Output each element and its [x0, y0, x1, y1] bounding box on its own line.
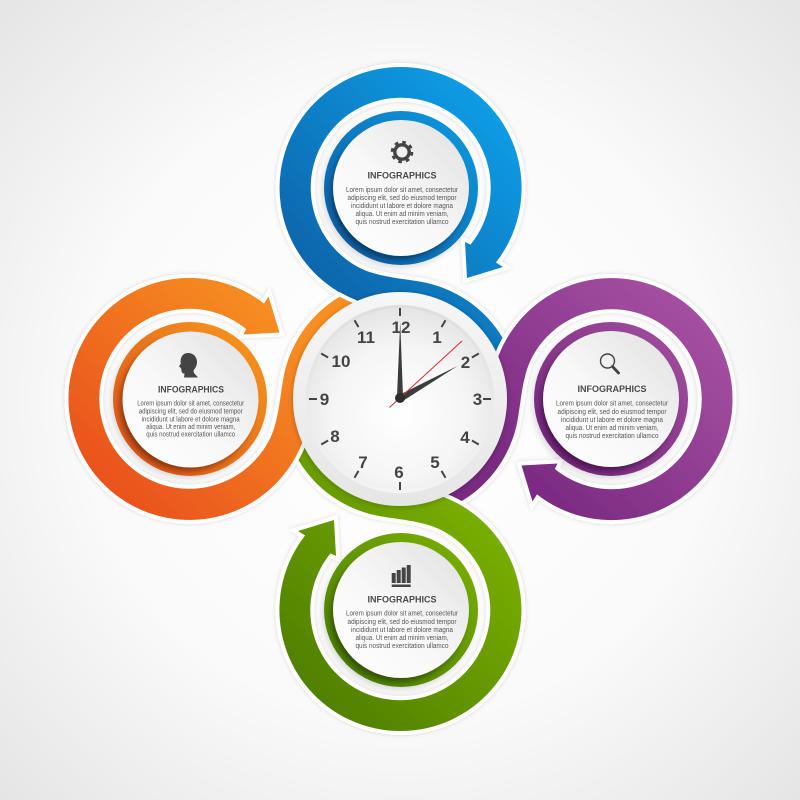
orange paper circle	[122, 332, 258, 468]
blue body text: quis nostrud exercitation ullamco	[356, 219, 449, 226]
clock numerals: 4	[460, 428, 470, 447]
purple body text: incididunt ut labore et dolore magna	[561, 417, 663, 424]
panel: blue step	[280, 67, 522, 360]
purple body text: aliqua. Ut enim ad minim veniam,	[566, 425, 659, 432]
blue paper circle	[333, 120, 469, 256]
panel: orange step	[68, 278, 361, 520]
clock numerals: 8	[330, 427, 340, 446]
clock hub	[395, 393, 405, 403]
icon: magnifier	[600, 354, 618, 373]
purple body text: adipiscing elit, sed do eiusmod tempor	[558, 409, 667, 416]
icon: gear	[392, 142, 412, 162]
panel: purple step	[440, 278, 733, 520]
hour ticks	[309, 308, 491, 490]
purple body text	[556, 400, 669, 440]
green body text: adipiscing elit, sed do eiusmod tempor	[348, 619, 457, 626]
clock numerals: 2	[461, 353, 470, 372]
panel: green step	[279, 438, 521, 731]
clock numerals	[320, 318, 482, 482]
clock	[293, 292, 507, 506]
clock numerals: 5	[430, 453, 440, 472]
blue body text: aliqua. Ut enim ad minim veniam,	[356, 211, 449, 218]
purple heading: INFOGRAPHICS	[578, 384, 647, 395]
purple inner disc	[534, 322, 688, 476]
green body text	[346, 610, 459, 650]
orange spiral arrow band	[68, 278, 361, 520]
green spiral arrow band	[279, 438, 521, 731]
icon: bar chart	[392, 565, 411, 587]
purple body text: Lorem ipsum dolor sit amet, consectetur	[556, 400, 669, 408]
clock face	[309, 308, 491, 490]
blue body text: incididunt ut labore et dolore magna	[351, 203, 453, 210]
clock outer rim	[293, 292, 507, 506]
green paper circle	[333, 542, 469, 678]
orange body text: adipiscing elit, sed do eiusmod tempor	[139, 408, 243, 416]
orange body text: Lorem ipsum dolor sit amet, consectetur	[137, 400, 245, 408]
clock numerals: 1	[432, 328, 442, 347]
clock numerals: 12	[392, 318, 410, 337]
orange inner disc	[113, 322, 267, 476]
blue body text: Lorem ipsum dolor sit amet, consectetur	[346, 187, 459, 194]
green heading: INFOGRAPHICS	[368, 594, 437, 606]
purple spiral arrow band	[440, 278, 733, 520]
clock numerals: 6	[394, 463, 404, 482]
green body text: quis nostrud exercitation ullamco	[356, 643, 449, 650]
hour hand	[398, 366, 458, 402]
blue spiral arrow band	[280, 67, 522, 360]
clock numerals: 11	[357, 328, 375, 347]
orange body text: incididunt ut labore et dolore magna	[142, 416, 240, 424]
clock numerals: 9	[320, 390, 329, 409]
orange heading: INFOGRAPHICS	[158, 384, 225, 396]
green body text: aliqua. Ut enim ad minim veniam,	[356, 635, 449, 642]
green body text: incididunt ut labore et dolore magna	[351, 627, 453, 634]
blue body text: adipiscing elit, sed do eiusmod tempor	[348, 195, 457, 202]
icon: head silhouette	[179, 353, 198, 378]
purple body text: quis nostrud exercitation ullamco	[566, 433, 659, 440]
clock inner bevel	[306, 305, 494, 493]
second hand	[390, 341, 462, 408]
orange body text	[137, 400, 245, 438]
green inner disc	[324, 533, 478, 687]
orange body text: quis nostrud exercitation ullamco	[146, 432, 235, 438]
blue inner disc	[324, 111, 478, 265]
clock numerals: 3	[473, 390, 482, 409]
green body text: Lorem ipsum dolor sit amet, consectetur	[346, 610, 459, 618]
clock numerals: 7	[358, 453, 368, 472]
clock numerals: 10	[332, 352, 350, 371]
purple paper circle	[543, 331, 679, 467]
orange body text: aliqua. Ut enim ad minim veniam,	[146, 424, 235, 431]
minute hand	[397, 322, 403, 396]
blue body text	[346, 187, 459, 226]
blue heading: INFOGRAPHICS	[368, 170, 437, 182]
